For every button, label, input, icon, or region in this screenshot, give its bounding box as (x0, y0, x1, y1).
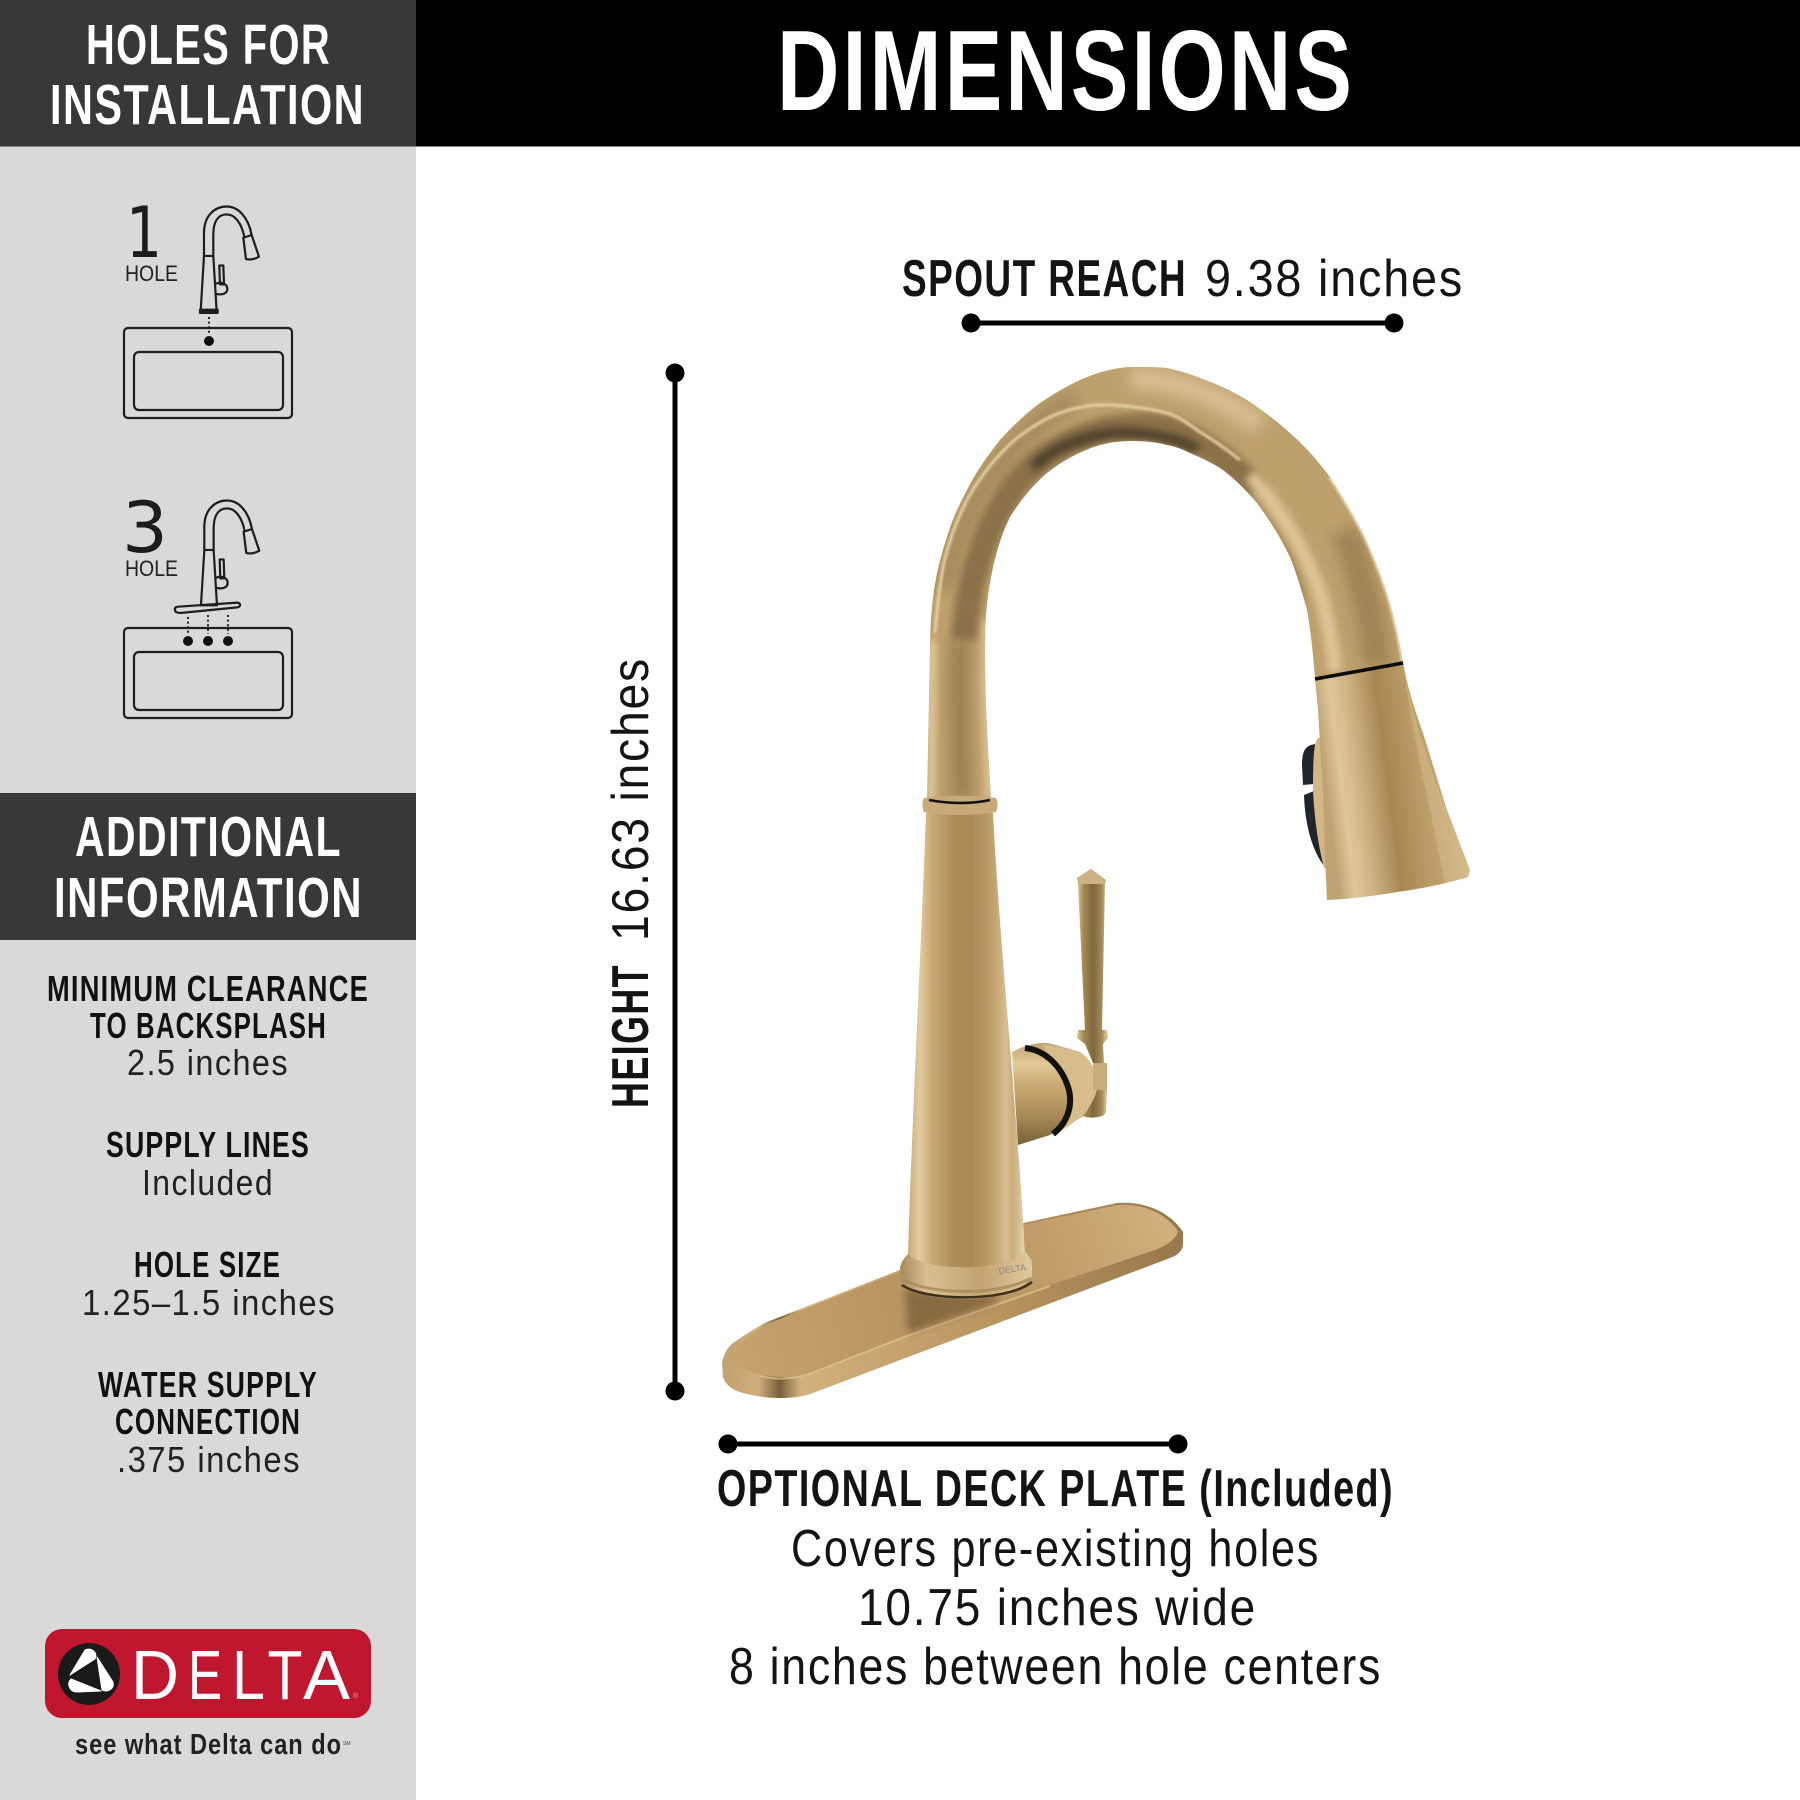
logo: delta: E (188, 1636, 222, 1714)
text block: hole size (82, 1244, 336, 1323)
text block: minimum clearance: MINIMUM CLEARANCE (47, 968, 369, 1009)
dimension line: height (666, 364, 684, 1400)
faucet body (900, 813, 1032, 1299)
spout (927, 367, 1403, 798)
label: spout reach: 9.38 inches (1205, 250, 1464, 308)
icon: three hole installation: 3 (122, 487, 168, 569)
text block: water supply connection: CONNECTION (115, 1401, 301, 1442)
text block: water supply connection: WATER SUPPLY (98, 1364, 318, 1405)
dimension line: deck plate (718, 1434, 1188, 1454)
heading: holes for installation: INSTALLATION (50, 73, 365, 137)
text block: optional deck plate: Covers pre-existing holes (791, 1520, 1320, 1578)
text block: supply lines: SUPPLY LINES (106, 1124, 310, 1165)
text block: minimum clearance (47, 968, 369, 1083)
logo: delta: see what Delta can do (75, 1729, 342, 1761)
logo: delta: SM (343, 1741, 350, 1747)
icon: one hole installation: HOLE (125, 261, 178, 286)
text block: optional deck plate: 10.75 inches wide (858, 1579, 1257, 1637)
logo: delta: L (232, 1636, 265, 1714)
text block: water supply connection (98, 1364, 318, 1480)
icon: one hole installation: 1 (126, 192, 162, 274)
sprayer trigger (1302, 738, 1330, 868)
logo: delta (45, 1629, 371, 1761)
logo: delta: ® (353, 1692, 359, 1700)
header: dimensions title bar (416, 0, 1800, 146)
label: height: HEIGHT (602, 964, 660, 1108)
deck plate (722, 1203, 1183, 1398)
text block: hole size: HOLE SIZE (134, 1244, 281, 1285)
logo: delta: D (131, 1636, 179, 1714)
text block: optional deck plate: 8 inches between hole centers (729, 1638, 1382, 1696)
text block: hole size: 1.25–1.5 inches (82, 1282, 336, 1323)
heading: additional information (0, 793, 416, 940)
faucet illustration (722, 340, 1470, 1398)
label: spout reach: SPOUT REACH (902, 250, 1187, 308)
logo: delta: A (303, 1636, 350, 1714)
text block: water supply connection: .375 inches (117, 1439, 301, 1480)
text block: optional deck plate: OPTIONAL DECK PLATE (Included) (717, 1460, 1394, 1518)
label: height (602, 657, 660, 1108)
dimension line: spout reach (962, 314, 1404, 332)
icon: one hole installation (124, 192, 292, 418)
text block: minimum clearance: TO BACKSPLASH (90, 1005, 327, 1046)
logo: delta: T (268, 1636, 302, 1714)
text block: supply lines: Included (142, 1162, 274, 1203)
header: dimensions title bar: DIMENSIONS (777, 8, 1355, 135)
spray head (1315, 662, 1470, 900)
label: height: 16.63 inches (602, 657, 660, 941)
collar (922, 796, 998, 815)
heading: additional information: INFORMATION (54, 866, 363, 930)
faucet body: DELTA (998, 1262, 1027, 1276)
icon: three hole installation (122, 487, 292, 718)
heading: holes for installation (0, 0, 416, 146)
heading: holes for installation: HOLES FOR (86, 13, 331, 77)
text block: optional deck plate (717, 1460, 1394, 1696)
handle (1012, 869, 1108, 1145)
panel: left sidebar (0, 0, 416, 1800)
text block: supply lines (106, 1124, 310, 1203)
text block: minimum clearance: 2.5 inches (127, 1042, 289, 1083)
heading: additional information: ADDITIONAL (75, 805, 342, 869)
icon: three hole installation: HOLE (125, 556, 178, 581)
